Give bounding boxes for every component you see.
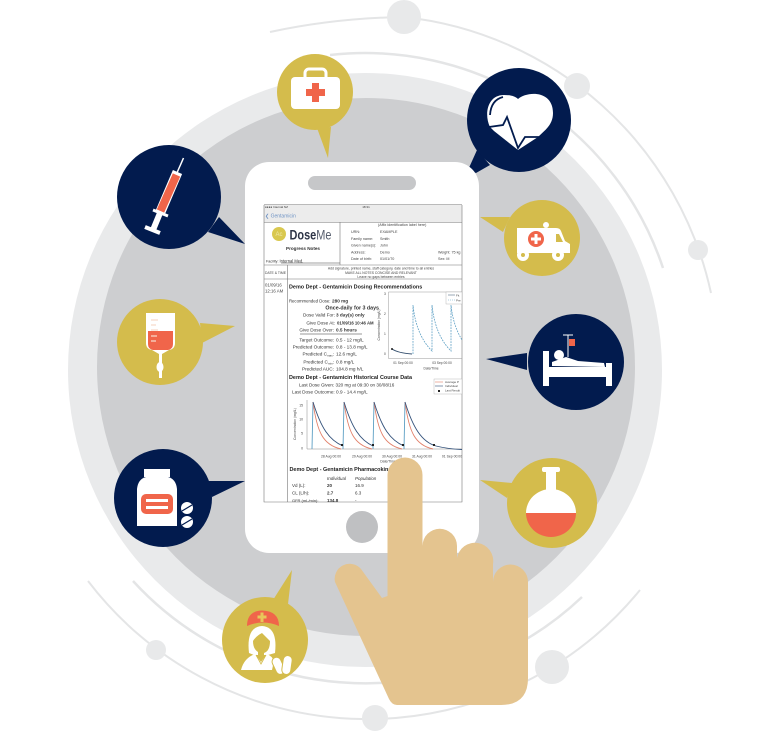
chart: historical concentration: 5 xyxy=(301,432,303,436)
dosing recommendations list: 12.6 mg/L xyxy=(336,352,357,356)
bubble: ambulance xyxy=(480,200,580,276)
historical course text xyxy=(292,382,395,394)
app navigation bar: ❮ Gentamicin xyxy=(265,214,296,220)
dosing recommendations heading: Demo Dept - Gentamicin Dosing Recommendations xyxy=(289,284,422,290)
DoseMe logo: Facility: Internal Med. xyxy=(266,258,303,264)
form frame lines xyxy=(264,204,462,502)
chart: historical concentration: 01 Sep 00:00 xyxy=(442,454,462,458)
DoseMe logo: DoseMe xyxy=(290,228,332,242)
chart: predicted concentration: Pre xyxy=(456,298,461,302)
pharmacokinetics table: 134.8 xyxy=(327,498,339,503)
dosing recommendations list: Target Outcome: xyxy=(299,338,334,342)
icon: medical kit xyxy=(291,69,340,109)
dosing recommendations list: Dose Valid For: xyxy=(303,312,335,318)
historical course text: Last Dose Outcome: 0.9 - 14.4 mg/L xyxy=(292,390,368,394)
app navigation bar xyxy=(264,205,462,222)
chart: predicted concentration: 2 xyxy=(384,312,386,316)
pharmacokinetics table: Individual xyxy=(327,476,347,481)
patient details: (Affix identification label here) xyxy=(378,223,426,227)
pharmacokinetics table: GFR (mL/min): xyxy=(292,498,318,503)
icon: medicine bottle xyxy=(137,469,193,528)
dosing recommendations list: Predicted AUC: xyxy=(302,366,334,372)
chart: predicted concentration: 0 xyxy=(384,352,386,356)
dosing recommendations list: 01/09/16 10:46 AM xyxy=(337,320,374,326)
icon: heart xyxy=(487,94,553,150)
icon: flask xyxy=(526,467,576,537)
patient details: Weight: 75 kg xyxy=(438,250,460,254)
icon: nurse xyxy=(241,610,293,676)
phone home button xyxy=(346,511,378,543)
patient details: 01/01/70 xyxy=(380,257,394,261)
dosing recommendations list: Predicted C xyxy=(303,360,328,364)
patient details: Date of birth: xyxy=(351,257,372,261)
chart: predicted concentration: Concentration (mg/L) xyxy=(377,310,381,340)
patient details: Smith xyxy=(380,237,389,241)
bubble: hospital bed xyxy=(486,314,624,410)
DoseMe logo: Progress Notes xyxy=(286,246,320,251)
chart: predicted concentration: 3 xyxy=(384,292,386,296)
patient details xyxy=(351,223,460,261)
bubble: medical kit xyxy=(277,54,353,158)
instructions row xyxy=(265,266,434,279)
icon: hospital bed xyxy=(543,335,612,386)
patient details: John xyxy=(380,244,388,248)
chart: historical concentration: 10 xyxy=(299,418,303,422)
pharmacokinetics heading: Demo Dept - Gentamicin Pharmacokinetic Details xyxy=(290,467,417,473)
instructions row: Add signature, printed name, staff category, date and time to all entries xyxy=(328,266,434,270)
dosing recommendations list: Predicted C xyxy=(303,352,327,356)
instructions row: Leave no gaps between entries xyxy=(357,275,405,279)
bubble: medicine bottle xyxy=(114,449,245,547)
chart: historical concentration: 29 Aug 00:00 xyxy=(352,454,372,458)
icon: syringe xyxy=(145,158,184,233)
chart: historical concentration: Individual xyxy=(445,384,458,388)
chart: predicted concentration: 1 xyxy=(384,332,386,336)
chart: historical concentration: Date/Time xyxy=(380,460,396,464)
chart: historical concentration: Last Result xyxy=(445,388,460,392)
entry date: 01/09/16 xyxy=(265,282,282,288)
chart: historical concentration: Concentration (mg/L) xyxy=(293,408,297,440)
chart: historical concentration: 31 Aug 00:00 xyxy=(412,454,432,458)
icon: ambulance xyxy=(517,222,570,261)
bubble: IV bag xyxy=(117,299,235,385)
DoseMe logo xyxy=(266,227,332,264)
pharmacokinetics table: Population xyxy=(355,476,377,481)
phone speaker xyxy=(308,176,416,190)
bubble: flask xyxy=(480,458,597,548)
chart: historical concentration: 0 xyxy=(301,446,303,450)
dosing recommendations list: 0.5 - 12 mg/L xyxy=(336,338,364,342)
entry date: 12:16 AM xyxy=(265,288,284,294)
pharmacokinetics table: 16.9 xyxy=(355,483,364,488)
dosing recommendations list: Recommended Dose: xyxy=(289,298,330,304)
background: concentric circles xyxy=(68,73,662,667)
patient details: URN: xyxy=(351,230,360,234)
patient details: Sex: M xyxy=(438,257,449,261)
chart: predicted concentration: 03 Sep 00:00 xyxy=(432,361,452,365)
chart: predicted concentration: Fit xyxy=(456,294,459,298)
chart: predicted concentration xyxy=(377,292,462,370)
dosing recommendations list: Predicted Outcome: xyxy=(293,344,334,350)
phone screen: progress notes xyxy=(264,204,462,503)
dosing recommendations list: 0.8 - 13.8 mg/L xyxy=(336,344,368,350)
dosing recommendations list: : xyxy=(333,360,334,364)
chart: historical concentration: 28 Aug 00:00 xyxy=(321,454,341,458)
chart: historical concentration: 30 Aug 00:00 xyxy=(382,454,402,458)
bubble: syringe xyxy=(117,145,245,249)
chart: historical concentration: Average P xyxy=(445,380,459,384)
chart: predicted concentration: Date/Time xyxy=(423,366,439,370)
icon: IV bag xyxy=(146,313,175,378)
phone body xyxy=(245,162,479,553)
app navigation bar: ●●●● Internal NZ xyxy=(265,205,288,209)
instructions row: DATE & TIME xyxy=(265,271,287,275)
app navigation bar: 18:31 xyxy=(362,205,370,209)
pharmacokinetics table: Vd (L): xyxy=(292,483,306,488)
dosing recommendations list: 0.8 mg/L xyxy=(336,360,355,364)
patient details: EXAMPLE xyxy=(380,230,398,234)
dosing recommendations list xyxy=(289,298,379,372)
patient details: Address: xyxy=(351,250,366,254)
DoseMe logo: Ac xyxy=(276,232,283,238)
bubble: nurse xyxy=(222,570,308,683)
dosing recommendations list: max xyxy=(327,354,333,358)
bubble: heart xyxy=(467,68,571,173)
dosing recommendations list: 0.5 hours xyxy=(336,328,357,332)
chart: historical concentration xyxy=(293,379,462,464)
instructions row: MAKE ALL NOTES CONCISE AND RELEVANT xyxy=(345,271,417,275)
dosing recommendations list: Give Dose Over: xyxy=(299,328,334,332)
patient details: Demo xyxy=(380,250,390,254)
dosing recommendations list: 280 mg xyxy=(332,298,348,304)
patient details: Given name(s): xyxy=(351,244,376,248)
pointing hand xyxy=(335,458,528,705)
pharmacokinetics table: 20 xyxy=(327,483,333,488)
pharmacokinetics table: 6.3 xyxy=(355,490,362,496)
chart: predicted concentration: 01 Sep 00:00 xyxy=(393,361,413,365)
pharmacokinetics table: - xyxy=(355,498,357,503)
historical course text: Last Dose Given: 320 mg at 09:30 on 30/08/16 xyxy=(299,382,395,388)
dosing recommendations list: 3 day(s) only xyxy=(336,312,365,318)
dosing recommendations list: Once-daily for 3 days xyxy=(325,306,379,312)
chart: historical concentration: 15 xyxy=(299,404,303,408)
patient details: Family name: xyxy=(351,237,373,241)
dosing recommendations list: 104.8 mg h/L xyxy=(336,366,364,372)
historical course heading: Demo Dept - Gentamicin Historical Course Data xyxy=(289,375,413,381)
pharmacokinetics table xyxy=(292,476,377,503)
pharmacokinetics table: 2.7 xyxy=(327,490,334,496)
dosing recommendations list: min xyxy=(328,362,333,366)
dosing recommendations list: : xyxy=(333,352,334,356)
pharmacokinetics table: CL (L/h): xyxy=(292,490,309,496)
dosing recommendations list: Give Dose At: xyxy=(306,320,335,326)
